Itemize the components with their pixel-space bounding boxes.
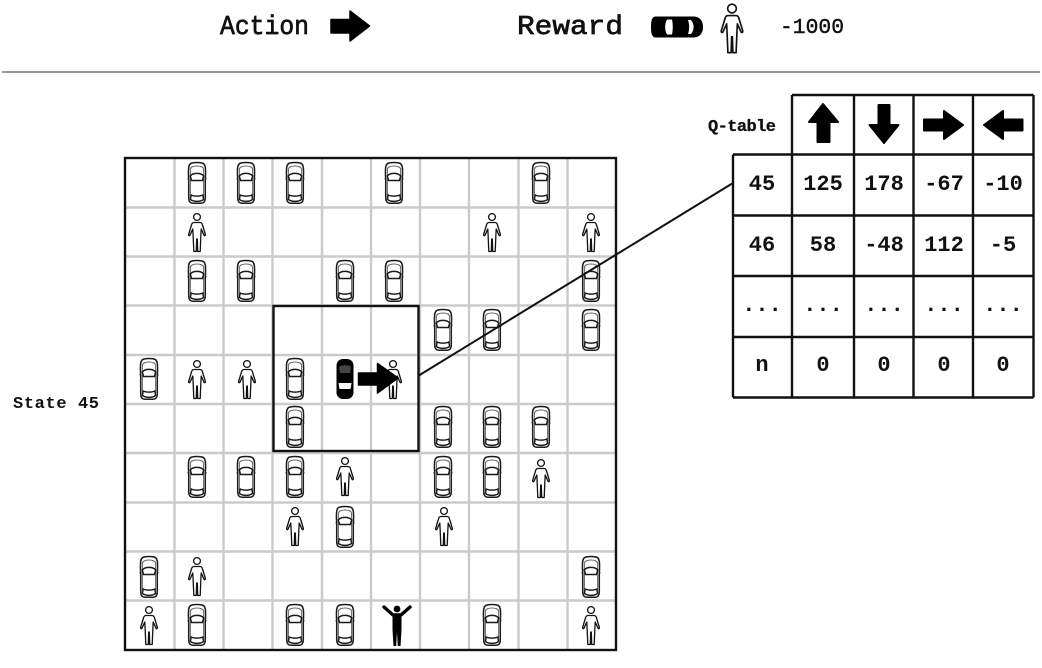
panel: gridworld	[125, 158, 616, 650]
icon: crashed car	[651, 16, 703, 38]
Q-table	[708, 95, 1034, 398]
table values: -67	[924, 172, 964, 197]
table values: ...	[983, 293, 1023, 318]
table values	[742, 172, 1023, 378]
reward value: -1000	[780, 17, 844, 40]
header: action legend	[220, 11, 370, 43]
icon: person hit	[721, 4, 743, 53]
table values: ...	[742, 293, 782, 318]
icon: right arrow	[924, 111, 963, 139]
table values: 58	[810, 233, 836, 258]
icon: agent action arrow	[358, 364, 398, 393]
table values: n	[755, 353, 769, 378]
table values: 178	[864, 172, 904, 197]
table values: 0	[996, 353, 1010, 378]
icon: agent car	[336, 359, 354, 399]
table values: -5	[990, 233, 1016, 258]
table values: 46	[749, 233, 775, 258]
state label: State 45	[13, 395, 99, 414]
icon: action arrow	[331, 11, 370, 41]
header: reward legend	[517, 4, 844, 53]
table values: -48	[864, 233, 904, 258]
agent neighbourhood box	[274, 306, 418, 451]
cars and pedestrians	[140, 163, 600, 645]
table grid	[733, 95, 1034, 398]
reward label: Reward	[517, 13, 623, 43]
table values: ...	[803, 293, 843, 318]
table values: 125	[803, 172, 843, 197]
table values: ...	[864, 293, 904, 318]
table values: 0	[937, 353, 951, 378]
Q-table title: Q-table	[708, 118, 776, 137]
table values: 45	[749, 172, 775, 197]
table values: 0	[816, 353, 830, 378]
table values: ...	[924, 293, 964, 318]
icon: up arrow	[809, 104, 838, 142]
table values: 112	[924, 233, 964, 258]
connector line	[418, 183, 733, 376]
table values: 0	[877, 353, 891, 378]
action label: Action	[220, 13, 309, 43]
table values: -10	[983, 172, 1023, 197]
icon: goal figure	[384, 606, 410, 646]
icon: left arrow	[984, 111, 1022, 139]
icon: down arrow	[870, 105, 898, 143]
